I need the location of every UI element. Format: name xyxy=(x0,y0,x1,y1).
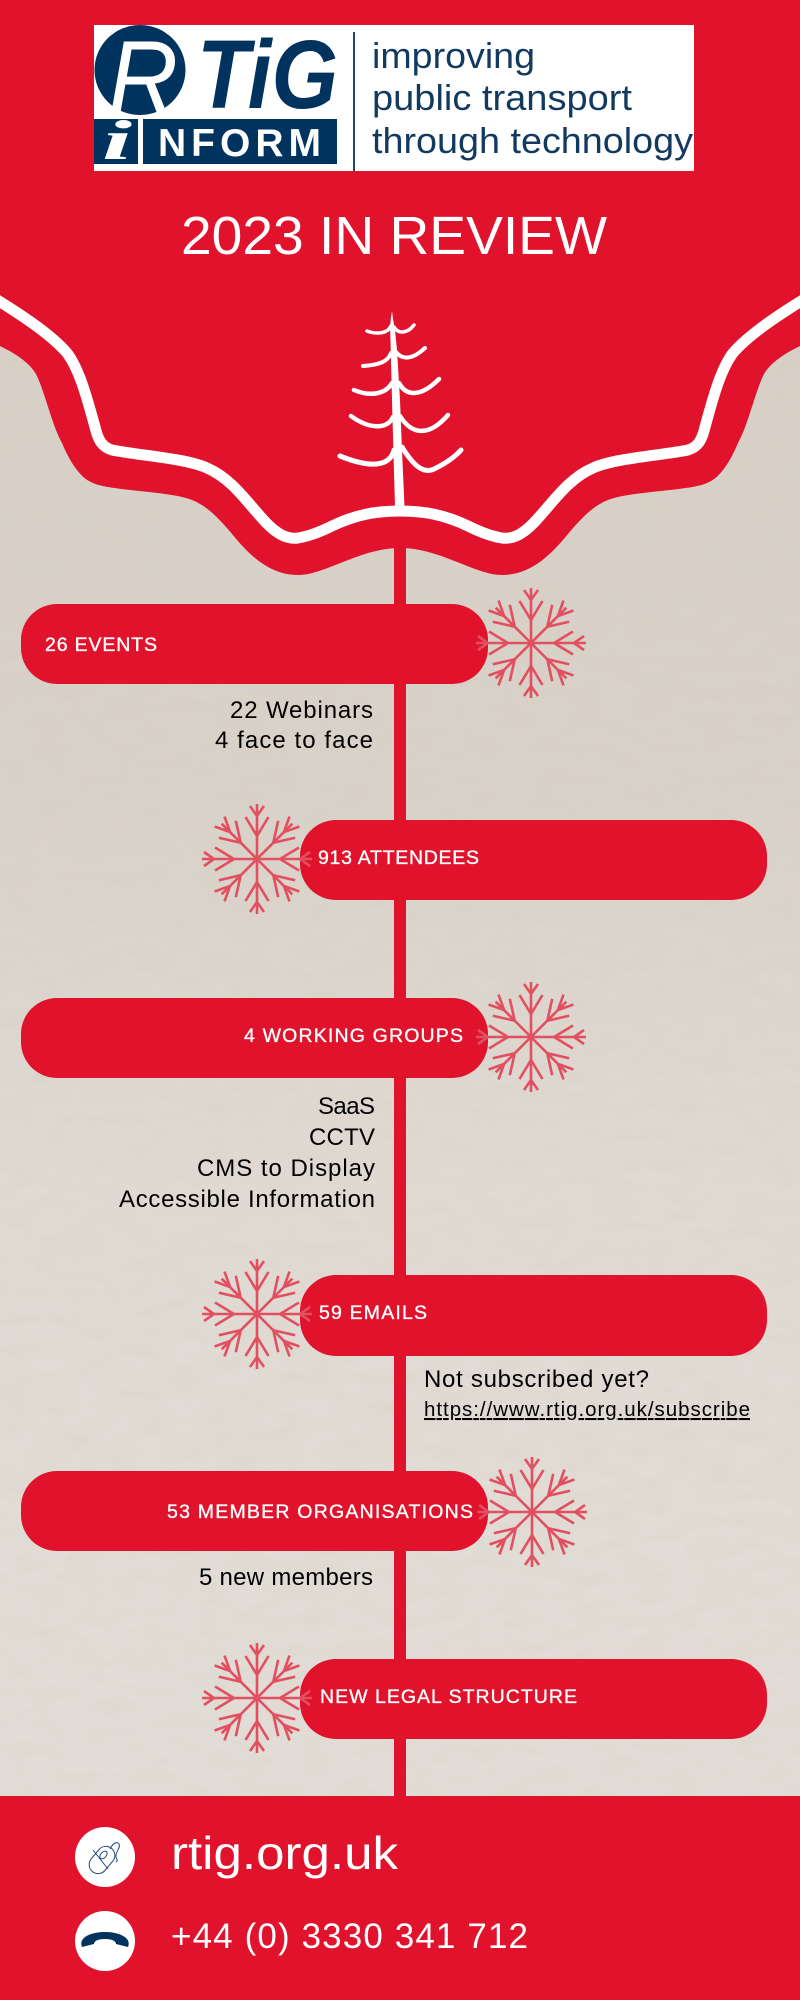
header red wave panel xyxy=(0,0,800,575)
icon: snowflake xyxy=(202,1259,312,1369)
icon: snowflake xyxy=(477,1457,587,1567)
panel: 26 events xyxy=(21,604,488,684)
white wave line xyxy=(0,298,800,538)
text: website: rtig.org.uk xyxy=(171,1827,399,1879)
logo mark: R in circle: R xyxy=(108,18,178,138)
logo i box xyxy=(94,110,138,172)
text: events detail xyxy=(215,697,373,754)
logo strapline: public transport xyxy=(372,77,632,118)
icon: snowflake xyxy=(202,804,312,914)
logo xyxy=(94,18,694,172)
text: working groups list: CCTV xyxy=(309,1124,375,1151)
panel: 53 member organisations xyxy=(21,1471,488,1551)
text: subscribe prompt: https://www.rtig.org.uk/subscribe xyxy=(424,1398,750,1421)
text: events detail: 22 Webinars xyxy=(230,697,373,724)
icon: computer mouse xyxy=(75,1827,135,1887)
logo i box: i xyxy=(102,110,133,172)
panel: 4 working groups xyxy=(21,998,488,1078)
logo strapline: through technology xyxy=(372,120,693,161)
footer panel xyxy=(0,1796,800,2000)
text: working groups list xyxy=(119,1093,375,1213)
panel: 913 attendees xyxy=(300,820,767,900)
text: working groups list: Accessible Information xyxy=(119,1186,375,1213)
text: events detail: 4 face to face xyxy=(215,727,373,754)
logo NFORM box: NFORM xyxy=(158,122,321,165)
timeline vertical line xyxy=(394,540,406,1800)
logo strapline: improving xyxy=(372,35,535,76)
panel: 53 member organisations: 53 MEMBER ORGANISATIONS xyxy=(167,1501,473,1523)
icon: telephone xyxy=(75,1911,135,1971)
panel: 59 emails xyxy=(300,1275,767,1356)
icon: snowflake xyxy=(476,588,586,698)
panel: 4 working groups: 4 WORKING GROUPS xyxy=(244,1025,463,1047)
text: subscribe prompt xyxy=(424,1366,750,1421)
text: phone number: +44 (0) 3330 341 712 xyxy=(171,1917,528,1956)
icon: pine tree xyxy=(340,311,461,507)
icon: snowflake xyxy=(202,1643,312,1753)
panel: 59 emails: 59 EMAILS xyxy=(319,1302,427,1324)
panel: new legal structure xyxy=(300,1659,767,1739)
text: new members: 5 new members xyxy=(199,1564,373,1591)
icon: snowflake xyxy=(476,982,586,1092)
text: working groups list: CMS to Display xyxy=(197,1155,375,1182)
text: working groups list: SaaS xyxy=(318,1093,375,1120)
panel: 26 events: 26 EVENTS xyxy=(45,634,157,656)
logo wordmark TiG: TiG xyxy=(197,20,338,129)
panel: new legal structure: NEW LEGAL STRUCTURE xyxy=(320,1686,577,1708)
text: subscribe prompt: Not subscribed yet? xyxy=(424,1366,649,1393)
logo strapline xyxy=(372,35,693,161)
title: 2023 IN REVIEW xyxy=(181,206,607,266)
panel: 913 attendees: 913 ATTENDEES xyxy=(318,847,479,869)
